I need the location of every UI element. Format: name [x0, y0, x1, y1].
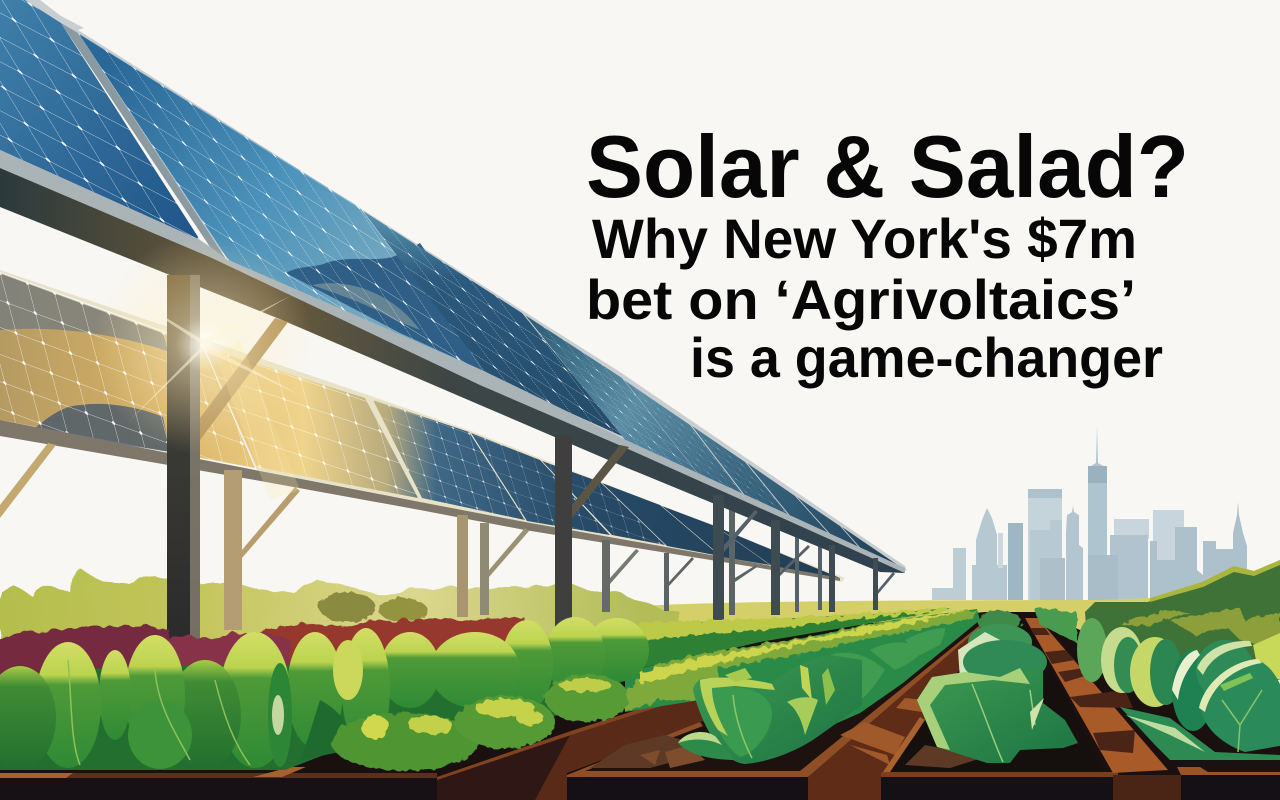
- distant field and hill: [640, 560, 1280, 680]
- background bushes: [0, 570, 680, 650]
- frilly lettuces: [331, 674, 629, 771]
- city skyline: [932, 426, 1247, 600]
- subtitle line 2: bet on ‘Agrivoltaics’: [586, 268, 1136, 331]
- front romaine lettuce row: [0, 617, 649, 770]
- red lettuce row: [0, 618, 525, 690]
- front row solar panels: [0, 0, 907, 573]
- front row posts and braces: [167, 275, 895, 650]
- second lettuce row: [625, 609, 980, 735]
- headline: [586, 117, 1189, 389]
- ground base: [0, 612, 1280, 800]
- center-left cabbage: [678, 655, 862, 764]
- center cabbage row: [917, 611, 1078, 763]
- right cabbage row: [1033, 607, 1280, 760]
- far lettuce row: [640, 607, 950, 668]
- back row posts and braces: [0, 443, 822, 630]
- back row solar panels: [0, 270, 845, 582]
- subtitle line 3: is a game-changer: [690, 326, 1163, 389]
- sun glare: [93, 235, 313, 500]
- planter boxes and soil: [0, 618, 1280, 800]
- subtitle line 1: Why New York's $7m: [592, 207, 1137, 270]
- title line: Solar & Salad?: [586, 117, 1189, 216]
